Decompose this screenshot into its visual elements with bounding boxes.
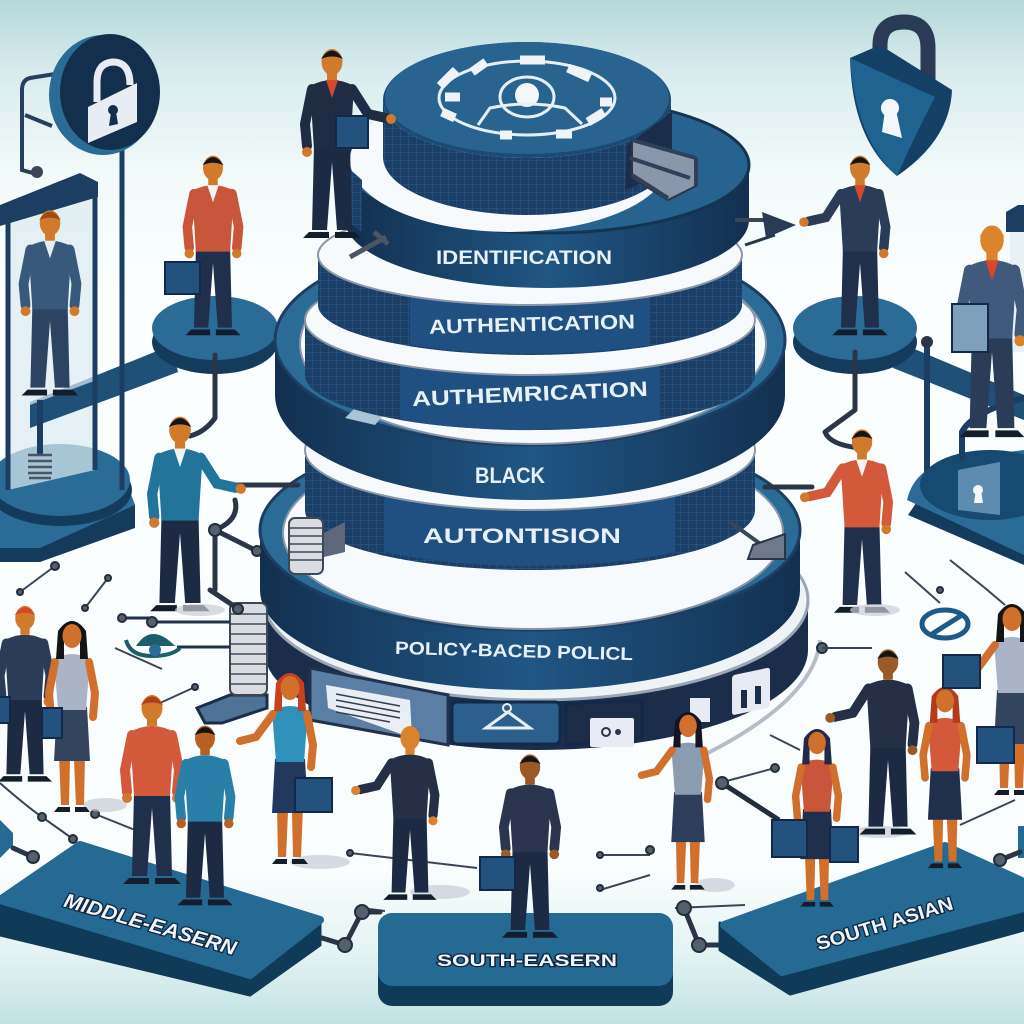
drum: authorisation: AUTONTISION: [423, 525, 621, 548]
icon panel: hanger: [452, 702, 560, 744]
ring: policy: [260, 430, 800, 690]
ring: identification: [345, 88, 749, 288]
icon: padlock circle: [22, 34, 160, 490]
text panel: [310, 668, 448, 745]
connector: teal person lower pipes: [209, 500, 262, 614]
arrow: right of drum: [730, 522, 785, 559]
base drum with panels: [264, 500, 872, 757]
person: suit top-right: [799, 156, 888, 335]
person: teal woman: [240, 673, 313, 864]
plaque: south asian: [720, 846, 1024, 994]
person: crowd suit left: [0, 606, 53, 782]
plaque: south-eastern: [378, 913, 673, 1006]
drum: authentication: [318, 205, 742, 355]
ring: black: BLACK: [475, 463, 545, 488]
connector: right platform to red person: [825, 352, 860, 448]
drum: authemrication: AUTHEMRICATION: [412, 378, 648, 411]
shadow blobs: [83, 604, 910, 899]
plaque: south asian: SOUTH ASIAN: [814, 894, 956, 955]
icon panel: white card: [690, 698, 710, 722]
person: teal sweater: [149, 417, 246, 611]
drum: authentication: AUTHENTICATION: [429, 311, 635, 339]
person: woman far right: [962, 604, 1024, 795]
person: grey right: [958, 225, 1024, 437]
connector: plaque middle to right: [677, 901, 720, 952]
person: suit right: [825, 649, 917, 834]
plaque: south-eastern: SOUTH-EASERN: [437, 951, 617, 970]
icon: small key emblem left: [126, 636, 180, 656]
panel: left upper platform: [30, 296, 278, 428]
arrow: identification right: [735, 212, 796, 245]
ring: policy: POLICY-BACED POLICL: [395, 638, 633, 664]
plaque: far-right stub: [994, 826, 1024, 866]
icon panel: badge: [566, 700, 642, 747]
plaque: far-left stub: [0, 820, 39, 863]
rod: right crowd handle: [716, 777, 779, 820]
person: on tower: [302, 49, 396, 238]
coin stack: [289, 518, 345, 574]
person: red sweater top-left: [184, 156, 242, 335]
icon: coil spring: [28, 400, 52, 478]
arrow: authentication left: [350, 232, 388, 257]
person: red shirt crowd: [122, 695, 182, 884]
top drum: [383, 42, 671, 215]
person: woman red: [796, 729, 838, 907]
connector: left platform to teal person: [190, 355, 215, 436]
rod: left handle: [235, 482, 298, 488]
drum: authemrication: [305, 265, 755, 430]
panel: glass booth platform: [0, 173, 135, 562]
person: teal shirt crowd: [176, 726, 234, 905]
briefcases: [0, 116, 1014, 890]
tray on top drum: [625, 112, 696, 200]
person: woman red right: [923, 687, 967, 868]
panel: right lower platform: [907, 205, 1024, 565]
panel: right upper platform: [793, 296, 1024, 490]
plaque: middle-eastern: [0, 845, 320, 995]
connector lines: [0, 560, 1015, 911]
ring: identification: IDENTIFICATION: [436, 248, 612, 269]
person: woman grey right: [642, 712, 709, 890]
connector: plaque left to middle: [322, 905, 380, 952]
person: suit from behind: [501, 754, 559, 938]
plaque: middle-eastern: MIDDLE-EASERN: [61, 890, 239, 960]
person: red shirt right: [800, 429, 891, 613]
person: suit walking: [351, 726, 438, 900]
person: crowd woman left: [49, 621, 95, 812]
person: in glass booth: [21, 210, 79, 395]
coin stack lower: [118, 603, 267, 723]
icon: lock block: [958, 462, 1000, 515]
rod: right handle: [765, 484, 812, 490]
icon: shield padlock: [850, 22, 952, 176]
icon: gear with user: [439, 60, 615, 135]
icon: no-entry emblem right: [922, 610, 968, 638]
icon panel: arrows: [732, 667, 770, 715]
drum: authorisation: [305, 390, 755, 570]
panel: access control tower: [235, 42, 872, 757]
ring: black: [275, 235, 785, 500]
